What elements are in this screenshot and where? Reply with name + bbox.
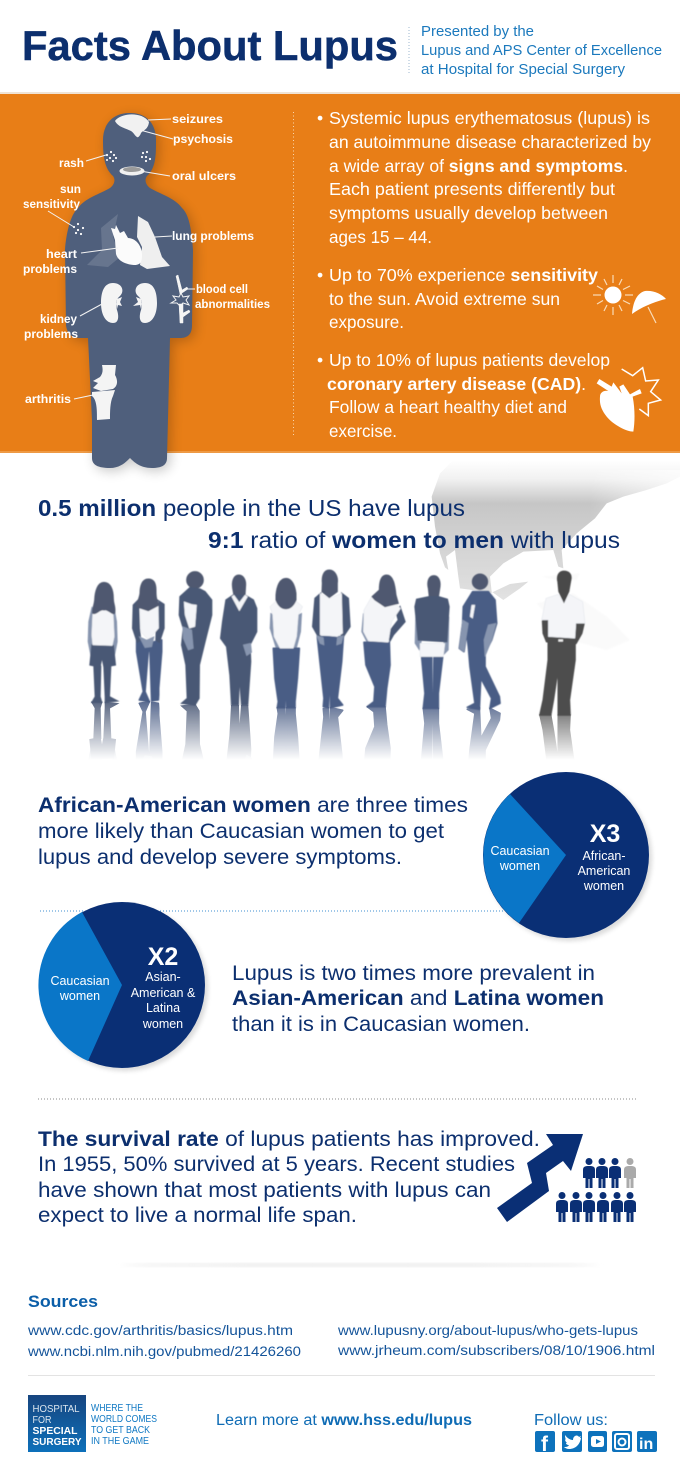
icon: lungs — [87, 214, 170, 269]
symptoms text — [317, 108, 651, 441]
symptoms text: a wide array of signs and symptoms. — [329, 156, 628, 176]
follow us: Follow us: — [534, 1412, 608, 1429]
pie chart: X3: Caucasian — [490, 844, 550, 858]
panel: orange symptoms — [0, 92, 680, 471]
pie chart: X2: X2 — [148, 943, 178, 971]
person 10: man — [540, 571, 585, 715]
pie chart: X2: women — [142, 1017, 183, 1031]
pie chart: X2: Asian- — [145, 970, 181, 984]
statistics text — [38, 495, 620, 553]
text: African-American women: more likely than Caucasian women to get — [38, 819, 444, 843]
text: African-American women: African-American women are three times — [38, 793, 468, 817]
person 8 — [415, 576, 449, 708]
icon: rash dots — [106, 151, 151, 162]
body labels: seizures — [172, 112, 223, 126]
symptoms text: Systemic lupus erythematosus (lupus) is — [329, 108, 650, 128]
icon: kidneys — [101, 283, 157, 323]
person 5 — [270, 578, 303, 708]
logo: SURGERY — [32, 1436, 82, 1448]
pie chart: X2 — [38, 902, 208, 1071]
text: Asian-American and Latina women: than it is in Caucasian women. — [232, 1012, 530, 1036]
body labels: lung problems — [172, 229, 254, 243]
text: Asian-American and Latina women: Lupus is two times more prevalent in — [232, 961, 595, 985]
body labels: psychosis — [173, 132, 233, 146]
silhouettes: group of people — [88, 570, 585, 715]
symptoms text: Each patient presents differently but — [329, 179, 615, 199]
title: Facts About Lupus — [22, 22, 398, 69]
logo: FOR — [32, 1414, 52, 1426]
presenter text: Presented by the — [421, 24, 534, 40]
logo: IN THE GAME — [91, 1436, 149, 1447]
people group one — [88, 572, 257, 705]
text: Asian-American and Latina women — [232, 961, 604, 1036]
pie chart: X3: X3 — [590, 820, 620, 848]
sources: www.cdc.gov/arthritis/basics/lupus.htm — [27, 1323, 293, 1338]
symptoms text: exposure. — [329, 312, 404, 332]
pie chart: X2: Latina — [146, 1001, 180, 1015]
symptoms text: coronary artery disease (CAD). — [327, 374, 586, 394]
sources — [27, 1292, 655, 1359]
body labels: problems — [24, 327, 78, 341]
sources: Sources — [28, 1292, 98, 1311]
body figure — [65, 113, 196, 471]
text: survival rate: have shown that most patients with lupus can — [38, 1178, 491, 1202]
statistics text: 0.5 million people in the US have lupus — [38, 495, 465, 521]
body labels: sensitivity — [23, 197, 80, 211]
body labels — [23, 112, 270, 406]
logo: WHERE THE — [91, 1403, 143, 1414]
body labels: sun — [60, 182, 81, 196]
icon: knee — [92, 365, 117, 420]
person 9 — [459, 574, 500, 709]
icon: mouth — [120, 166, 144, 176]
sources: www.lupusny.org/about-lupus/who-gets-lupus — [337, 1323, 638, 1338]
logo: WORLD COMES — [91, 1414, 157, 1425]
person 2 — [133, 579, 164, 702]
body labels: blood cell — [196, 282, 248, 296]
logo: TO GET BACK — [91, 1425, 150, 1436]
symptoms text: • — [317, 108, 323, 128]
text: African-American women: lupus and develop severe symptoms. — [38, 845, 402, 869]
person 7 — [362, 575, 405, 707]
presenter text: Lupus and APS Center of Excellence — [421, 43, 662, 59]
pie chart: X3: women — [499, 859, 540, 873]
body labels: kidney — [40, 312, 77, 326]
symptoms text: Up to 10% of lupus patients develop — [329, 350, 610, 370]
symptoms text: ages 15 – 44. — [329, 227, 432, 247]
social icons: f — [541, 1433, 549, 1456]
person 1 — [88, 582, 117, 702]
body labels: abnormalities — [195, 297, 270, 311]
person 4 — [221, 575, 257, 705]
body labels: arthritis — [25, 392, 71, 406]
text: survival rate: expect to live a normal life span. — [38, 1203, 357, 1227]
icon: sun — [593, 275, 633, 315]
icon: heart with burst — [597, 368, 661, 432]
symptoms text: • — [317, 350, 323, 370]
icon: rising arrow — [497, 1134, 583, 1222]
text: African-American women — [38, 793, 468, 869]
leader lines — [48, 119, 195, 399]
learn more link: Learn more at www.hss.edu/lupus — [216, 1412, 472, 1429]
presenter text: at Hospital for Special Surgery — [421, 62, 626, 78]
symptoms text: symptoms usually develop between — [329, 203, 608, 223]
logo: HOSPITAL — [32, 1403, 80, 1415]
body labels: heart — [46, 247, 77, 261]
text: survival rate: The survival rate of lupus patients has improved. — [38, 1127, 540, 1151]
pie chart: X2: women — [59, 989, 100, 1003]
pie chart: X3: American — [578, 864, 630, 878]
body labels: rash — [59, 156, 84, 170]
person 3 — [179, 572, 212, 705]
sources: www.ncbi.nlm.nih.gov/pubmed/21426260 — [27, 1344, 301, 1359]
symptoms text: to the sun. Avoid extreme sun — [329, 289, 560, 309]
map background — [432, 460, 680, 650]
symptoms text: Up to 70% experience sensitivity — [329, 265, 598, 285]
social icons: in — [639, 1436, 653, 1453]
pie chart: X3: women — [583, 879, 624, 893]
pie chart: X2: American & — [131, 986, 196, 1000]
symptoms text: Follow a heart healthy diet and — [329, 397, 567, 417]
person 6 — [313, 570, 350, 708]
logo — [28, 1395, 157, 1452]
body labels: problems — [23, 262, 77, 276]
icon: sun sensitivity dots — [73, 223, 84, 235]
symptoms text: • — [317, 265, 323, 285]
pie chart: X2: Caucasian — [50, 974, 110, 988]
pie chart: X3 — [483, 772, 652, 941]
body labels: oral ulcers — [172, 169, 236, 183]
icon: heart — [111, 225, 142, 265]
pie chart: X3: African- — [582, 849, 626, 863]
text: survival rate — [38, 1127, 540, 1227]
people group three — [415, 571, 585, 715]
icon: umbrella — [632, 291, 666, 323]
symptoms text: an autoimmune disease characterized by — [329, 132, 651, 152]
statistics text: 9:1 ratio of women to men with lupus — [208, 527, 620, 553]
social icons — [535, 1431, 657, 1456]
people group two — [270, 570, 405, 708]
presenter text — [421, 24, 662, 78]
text: survival rate: In 1955, 50% survived at 5 years. Recent studies — [38, 1152, 515, 1176]
text: Asian-American and Latina women: Asian-American and Latina women — [232, 986, 604, 1010]
icon: people survival pictogram — [556, 1158, 636, 1222]
symptoms text: exercise. — [329, 421, 397, 441]
icon: brain — [115, 114, 149, 137]
sources: www.jrheum.com/subscribers/08/10/1906.html — [337, 1343, 655, 1358]
icon: blood vessel — [171, 275, 190, 323]
logo: SPECIAL — [32, 1425, 78, 1437]
silhouettes reflection — [89, 700, 574, 757]
